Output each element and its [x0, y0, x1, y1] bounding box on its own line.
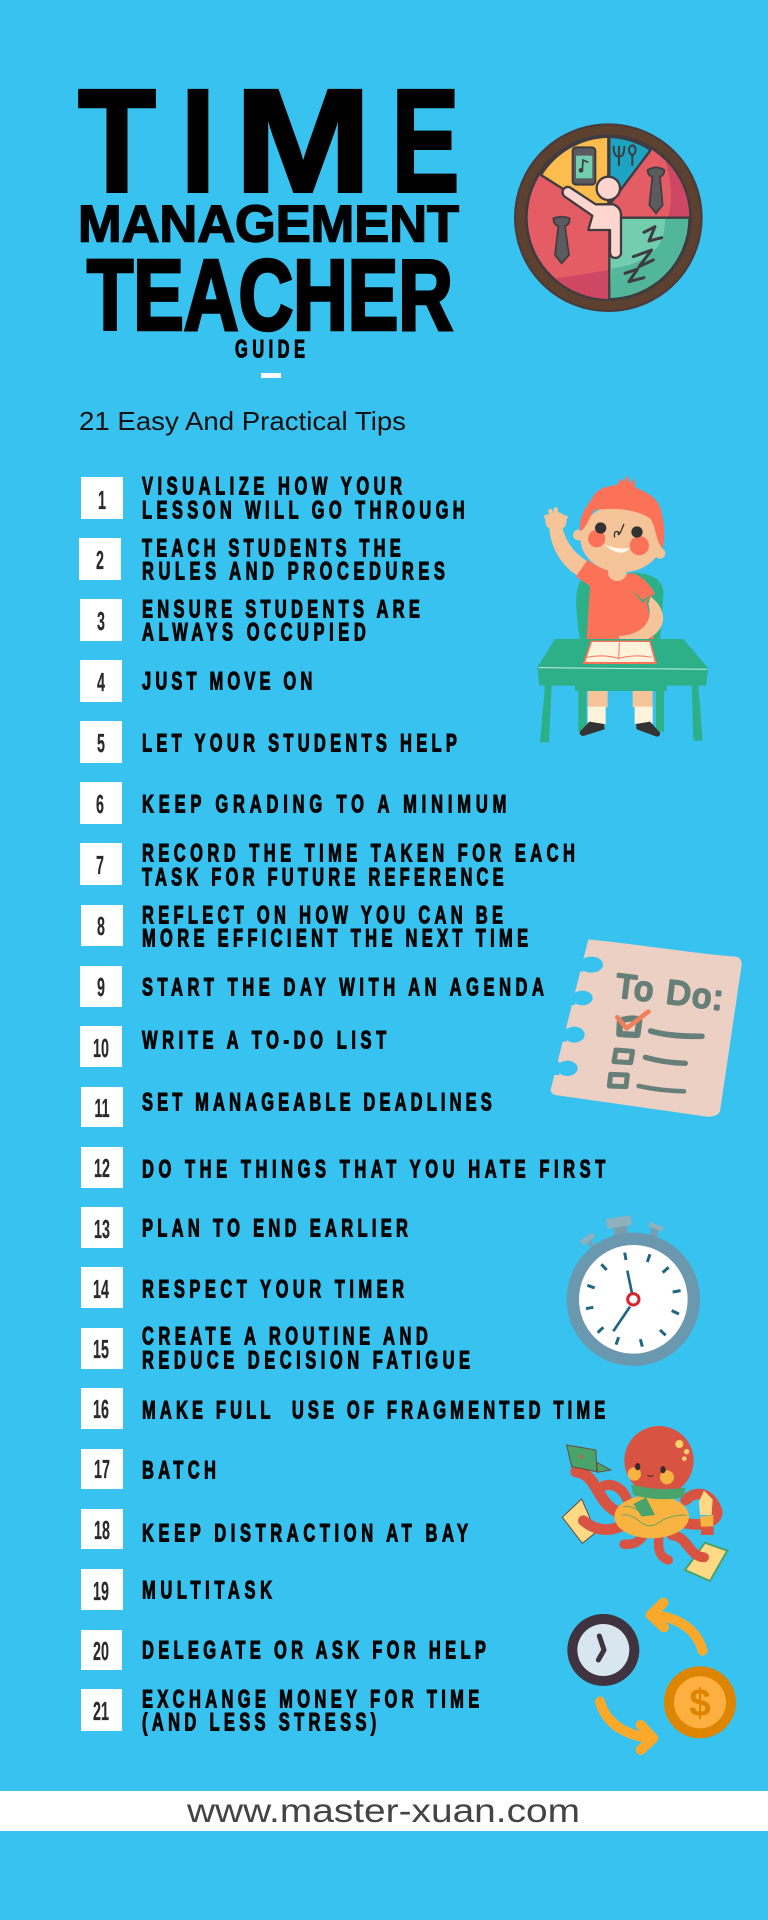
white dash [261, 373, 281, 378]
tip 17: 17 [94, 1456, 110, 1484]
tip 20: 20 [93, 1638, 109, 1666]
footer URL band [0, 1791, 768, 1831]
clock hands [613, 1271, 632, 1331]
tip 2: TEACH STUDENTS THE [142, 535, 401, 562]
tip 8 [81, 902, 528, 952]
tip 8: REFLECT ON HOW YOU CAN BE [142, 902, 503, 929]
tip 9: 9 [97, 974, 105, 1002]
scarf [631, 1484, 686, 1517]
title: MANAGEMENT: MANAGEMENT [78, 194, 459, 252]
phone with music note [573, 147, 595, 185]
tip 19 [81, 1569, 273, 1610]
arrow: time to money [600, 1702, 653, 1750]
tip 4: 4 [97, 669, 105, 697]
title block [78, 60, 460, 436]
tip 13: PLAN TO END EARLIER [142, 1215, 408, 1242]
tip 1: 1 [98, 487, 106, 515]
tip 15 [81, 1323, 470, 1374]
note heading: To Do: [614, 968, 725, 1018]
desk [537, 639, 708, 742]
tip 21: (AND LESS STRESS) [142, 1709, 376, 1736]
tip 18: KEEP DISTRACTION AT BAY [142, 1520, 468, 1547]
tip 20: DELEGATE OR ASK FOR HELP [142, 1637, 486, 1664]
tip 12 [81, 1147, 605, 1188]
chair [576, 573, 664, 732]
tip 16 [81, 1388, 605, 1429]
illustration: exchange money for time [567, 1603, 736, 1750]
tip 10 [80, 1026, 386, 1067]
papers [562, 1499, 596, 1543]
tip 10: WRITE A TO-DO LIST [142, 1027, 386, 1054]
tip 21: 21 [93, 1698, 109, 1726]
tip 9 [80, 966, 544, 1007]
stopwatch buttons [580, 1215, 664, 1248]
tip 5: LET YOUR STUDENTS HELP [142, 730, 457, 757]
title: TIME [78, 60, 460, 224]
title: GUIDE: GUIDE [235, 336, 305, 363]
coin icon [664, 1666, 736, 1738]
tip 18 [81, 1509, 468, 1549]
open book [583, 641, 657, 664]
icon: time-slice clock badge [515, 124, 702, 311]
shirt [576, 560, 655, 639]
tip 11 [81, 1087, 492, 1127]
tip 6: KEEP GRADING TO A MINIMUM [142, 791, 506, 818]
title: TEACHER: TEACHER [87, 240, 453, 352]
tip 18: 18 [94, 1517, 110, 1545]
tip 11: 11 [94, 1095, 110, 1123]
tip 21 [81, 1686, 479, 1736]
tip 20 [81, 1630, 486, 1670]
tip 16: MAKE FULL USE OF FRAGMENTED TIME [142, 1397, 605, 1424]
tip 14: 14 [93, 1276, 109, 1304]
fork and spoon [614, 145, 636, 165]
illustration: busy octopus [562, 1426, 727, 1581]
tip 13 [81, 1207, 408, 1248]
tip 17 [81, 1449, 216, 1489]
octopus body [614, 1495, 689, 1538]
coin icon: $ [689, 1682, 711, 1725]
title: TIME: T [78, 60, 156, 224]
legs and shoes [580, 685, 660, 737]
head [624, 1426, 694, 1495]
tip 14: RESPECT YOUR TIMER [142, 1276, 404, 1303]
pencil and mitten [699, 1491, 714, 1535]
tip 2: RULES AND PROCEDURES [142, 558, 445, 585]
tip 9: START THE DAY WITH AN AGENDA [142, 974, 544, 1001]
tip 15: CREATE A ROUTINE AND [142, 1323, 428, 1350]
raised arm [545, 509, 588, 576]
sleeping Zs [625, 227, 662, 282]
tip 5 [80, 721, 457, 763]
tip 3: ENSURE STUDENTS ARE [142, 596, 420, 623]
tip 3 [80, 596, 420, 646]
tip 2 [79, 535, 445, 585]
tip 1 [81, 473, 465, 524]
tip 21: EXCHANGE MONEY FOR TIME [142, 1686, 479, 1713]
dial ticks [586, 1253, 681, 1347]
tie left [553, 217, 570, 263]
tip 8: 8 [97, 913, 105, 941]
head [573, 475, 665, 581]
clock icon [567, 1614, 639, 1686]
tip 2: 2 [96, 547, 104, 575]
tip 3: 3 [97, 608, 105, 636]
tip 16: 16 [93, 1396, 109, 1424]
tie right [648, 167, 664, 213]
tip 17: BATCH [142, 1457, 216, 1484]
tip 1: VISUALIZE HOW YOUR [142, 473, 402, 500]
tip 6: 6 [96, 791, 104, 819]
tip 15: 15 [93, 1336, 109, 1364]
tip 3: ALWAYS OCCUPIED [142, 619, 366, 646]
title: TIME: E [392, 60, 460, 224]
title: TIME: I [180, 60, 216, 224]
tip 7: 7 [96, 852, 104, 880]
illustration: stopwatch [567, 1215, 700, 1366]
tip 4 [80, 660, 312, 702]
tip 11: SET MANAGEABLE DEADLINES [142, 1089, 492, 1116]
person reaching [562, 177, 621, 258]
tip 8: MORE EFFICIENT THE NEXT TIME [142, 925, 528, 952]
tentacles [576, 1472, 717, 1560]
tip 19: MULTITASK [142, 1577, 273, 1604]
tip 14 [81, 1267, 404, 1308]
tip 13: 13 [94, 1216, 110, 1244]
tip 7 [80, 840, 575, 891]
tip 4: JUST MOVE ON [142, 668, 312, 695]
illustration: to-do note [547, 939, 742, 1117]
arrow: money to time [651, 1603, 703, 1651]
footer URL band: www.master-xuan.com [186, 1792, 580, 1829]
laptop [567, 1445, 611, 1472]
tip 6 [80, 782, 506, 824]
tips list [79, 473, 605, 1736]
tip 5: 5 [97, 730, 105, 758]
tip 19: 19 [93, 1578, 109, 1606]
tip 1: LESSON WILL GO THROUGH [142, 497, 465, 524]
punched holes [547, 957, 603, 1076]
checklist [609, 1018, 702, 1091]
tip 7: TASK FOR FUTURE REFERENCE [142, 864, 504, 891]
tip 12: 12 [94, 1155, 110, 1183]
tip 10: 10 [93, 1035, 109, 1063]
tip 12: DO THE THINGS THAT YOU HATE FIRST [142, 1156, 605, 1183]
tip 15: REDUCE DECISION FATIGUE [142, 1347, 470, 1374]
subtitle: 21 Easy And Practical Tips [79, 406, 406, 436]
illustration: student at desk [537, 475, 708, 742]
tip 7: RECORD THE TIME TAKEN FOR EACH [142, 840, 575, 867]
folded arm [619, 597, 663, 642]
title: TIME: M [234, 60, 372, 224]
